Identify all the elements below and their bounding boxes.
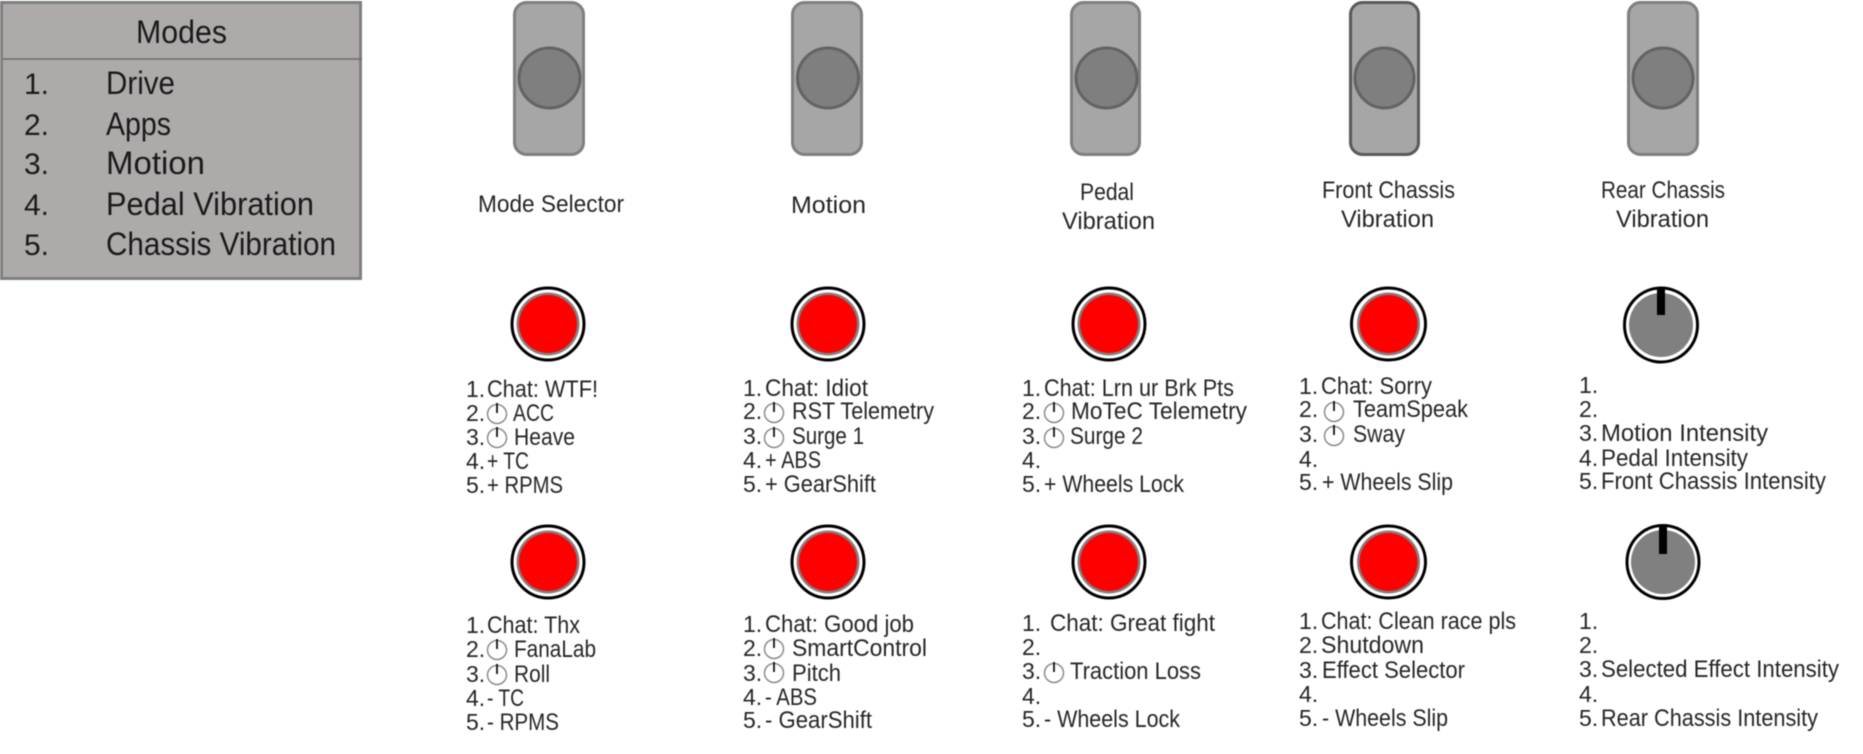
button: column 4 bottom — [1352, 526, 1426, 598]
text block: modes list: Apps — [106, 106, 171, 142]
button: column 2 top — [792, 288, 864, 360]
text block: column 1 top functions — [466, 376, 598, 499]
text block: column 1 bottom functions: Roll — [514, 661, 550, 688]
text block: column 2 top functions: 1. — [743, 375, 762, 401]
text block: column 4 bottom functions: 5. — [1299, 705, 1318, 731]
text block: column 4 top functions: 1. — [1299, 373, 1318, 399]
label: front chassis vibration: Vibration — [1341, 206, 1434, 233]
text block: column 1 top functions: Chat: WTF! — [487, 376, 598, 403]
text block: column 3 bottom functions: - Wheels Lock — [1044, 706, 1181, 733]
label: pedal vibration: Vibration — [1062, 208, 1155, 235]
text block: column 5 bottom functions: 1. — [1579, 608, 1598, 634]
text block: modes list: Drive — [106, 65, 175, 101]
text block: column 5 top functions: 5. — [1579, 468, 1598, 494]
text block: column 5 bottom functions: 2. — [1579, 632, 1598, 658]
text block: column 2 bottom functions: - ABS — [765, 684, 817, 711]
text block: column 3 bottom functions: 4. — [1022, 683, 1041, 709]
button: column 2 bottom — [792, 526, 864, 598]
text block: column 2 top functions: RST Telemetry — [792, 398, 934, 425]
icon: power — [488, 664, 506, 684]
text block: column 3 top functions: 5. — [1022, 471, 1041, 497]
text block: column 4 top functions: 3. — [1299, 421, 1318, 447]
text block: column 5 bottom functions: Selected Effect Intensity — [1601, 656, 1839, 683]
text block: column 4 top functions: 4. — [1299, 446, 1318, 472]
text block: column 2 top functions: Chat: Idiot — [765, 375, 868, 402]
text block: column 1 top functions: Heave — [514, 424, 575, 451]
icon: power — [764, 662, 784, 682]
text block: column 2 top functions: 3. — [743, 423, 762, 449]
text block: modes list: 5. — [24, 229, 49, 262]
icon: power — [1324, 401, 1344, 422]
text block: column 4 bottom functions: Effect Selector — [1322, 657, 1465, 684]
text block: column 2 top functions: Surge 1 — [792, 423, 864, 450]
label: pedal vibration — [1062, 179, 1155, 235]
label: pedal vibration: Pedal — [1080, 179, 1134, 206]
icon: power — [1324, 425, 1344, 446]
text block: column 1 top functions: 5. — [466, 472, 485, 498]
text block: column 1 top functions: 3. — [466, 424, 485, 450]
text block: column 2 top functions — [743, 375, 934, 498]
text block: column 4 bottom functions — [1299, 608, 1516, 732]
text block: column 2 bottom functions: 3. — [743, 660, 762, 686]
text block: column 4 top functions: TeamSpeak — [1353, 396, 1469, 423]
text block: column 3 bottom functions — [1022, 610, 1215, 733]
text block: column 2 top functions: + GearShift — [765, 471, 876, 498]
toggle: mode selector — [514, 2, 584, 154]
text block: column 2 bottom functions: 5. — [743, 707, 762, 733]
icon: power — [764, 427, 784, 448]
text block: column 5 top functions: Motion Intensity — [1601, 420, 1768, 447]
text block: column 4 top functions: Chat: Sorry — [1321, 373, 1432, 400]
knob: rotary top — [1624, 287, 1698, 362]
text block: column 5 bottom functions: 3. — [1579, 656, 1598, 682]
text block: column 2 bottom functions: Pitch — [792, 660, 841, 687]
text block: column 4 bottom functions: - Wheels Slip — [1322, 705, 1448, 732]
text block: column 4 bottom functions: 2. — [1299, 632, 1318, 658]
text block: column 3 bottom functions: 5. — [1022, 706, 1041, 732]
text block: column 2 top functions: 2. — [743, 398, 762, 424]
text block: column 3 top functions: 2. — [1022, 398, 1041, 424]
toggle: motion — [792, 2, 862, 154]
text block: column 1 bottom functions: 1. — [466, 612, 485, 638]
text block: column 5 top functions: 2. — [1579, 396, 1598, 422]
text block: column 5 top functions: Pedal Intensity — [1601, 445, 1748, 472]
text block: column 2 bottom functions: Chat: Good job — [765, 611, 914, 638]
button: column 3 top — [1073, 288, 1145, 360]
text block: column 2 bottom functions: - GearShift — [765, 707, 872, 734]
text block: column 3 bottom functions: 1. — [1022, 610, 1041, 636]
icon: power — [488, 427, 506, 448]
text block: column 4 bottom functions: Shutdown — [1321, 632, 1424, 659]
button: column 1 top — [512, 288, 584, 360]
text block: column 5 top functions: 3. — [1579, 420, 1598, 446]
text block: column 4 bottom functions: 1. — [1299, 608, 1318, 634]
text block: column 2 bottom functions: 1. — [743, 611, 762, 637]
text block: column 4 top functions: 2. — [1299, 396, 1318, 422]
text block: modes list: Motion — [106, 145, 205, 181]
text block: column 5 bottom functions: 5. — [1579, 705, 1598, 731]
toggle: pedal vibration — [1072, 2, 1140, 154]
text block: column 1 top functions: 1. — [466, 376, 485, 402]
text block: column 1 top functions: ACC — [513, 400, 554, 427]
label: motion: Motion — [791, 192, 866, 219]
text block: column 3 bottom functions: Traction Loss — [1070, 658, 1201, 685]
text block: column 4 bottom functions: 3. — [1299, 657, 1318, 683]
button: column 4 top — [1352, 288, 1426, 360]
text block: column 1 top functions: 2. — [466, 400, 485, 426]
text block: column 3 top functions: 3. — [1022, 423, 1041, 449]
text block: column 1 bottom functions: - RPMS — [487, 709, 559, 736]
label: rear chassis vibration: Vibration — [1616, 206, 1709, 233]
toggle: front chassis vibration — [1350, 2, 1418, 154]
text block: modes list: 1. — [24, 68, 49, 101]
text block: modes list: 2. — [24, 109, 49, 142]
text block: column 5 top functions: 4. — [1579, 445, 1598, 471]
button: column 1 bottom — [512, 526, 584, 598]
label: mode selector: Mode Selector — [478, 191, 624, 218]
text block: column 1 bottom functions: - TC — [487, 685, 524, 712]
text block: column 3 top functions: 4. — [1022, 447, 1041, 473]
icon: power — [764, 402, 784, 422]
text block: column 1 top functions: + RPMS — [487, 472, 563, 499]
icon: power — [1044, 662, 1064, 682]
text block: modes list: 4. — [24, 189, 49, 222]
text block: column 2 bottom functions — [743, 611, 927, 734]
text block: column 1 bottom functions: FanaLab — [514, 636, 596, 663]
text block: column 1 bottom functions: Chat: Thx — [487, 612, 580, 639]
text block: modes list: Chassis Vibration — [106, 226, 336, 262]
text block: column 5 bottom functions — [1579, 608, 1839, 732]
label: rear chassis vibration: Rear Chassis — [1601, 177, 1725, 204]
text block: column 1 bottom functions: 4. — [466, 685, 485, 711]
text block: column 3 top functions: 1. — [1022, 375, 1041, 401]
icon: power — [488, 639, 506, 660]
text block: modes list: Pedal Vibration — [106, 186, 314, 222]
text block: column 2 bottom functions: SmartControl — [792, 635, 927, 662]
text block: column 2 bottom functions: 2. — [743, 635, 762, 661]
text block: column 5 top functions: Front Chassis Intensity — [1601, 468, 1826, 495]
text block: column 1 top functions: 4. — [466, 448, 485, 474]
text block: column 3 bottom functions: 3. — [1022, 658, 1041, 684]
text block: modes list — [24, 65, 336, 262]
text block: column 3 top functions — [1022, 375, 1247, 498]
text block: column 1 bottom functions: 2. — [466, 636, 485, 662]
text block: column 1 top functions: + TC — [487, 448, 529, 475]
text block: column 2 top functions: 4. — [743, 447, 762, 473]
text block: column 3 top functions: Chat: Lrn ur Brk Pts — [1044, 375, 1234, 402]
label: front chassis vibration: Front Chassis — [1322, 177, 1455, 204]
text block: column 4 top functions — [1299, 373, 1469, 496]
text block: column 5 bottom functions: 4. — [1579, 681, 1598, 707]
text block: column 3 top functions: MoTeC Telemetry — [1071, 398, 1247, 425]
text block: modes list: 3. — [24, 148, 49, 181]
label: rear chassis vibration — [1601, 177, 1725, 233]
text block: column 2 top functions: 5. — [743, 471, 762, 497]
text block: column 4 top functions: + Wheels Slip — [1322, 469, 1453, 496]
text block: column 2 bottom functions: 4. — [743, 684, 762, 710]
text block: column 5 top functions — [1579, 372, 1826, 495]
knob: rotary bottom — [1627, 526, 1699, 598]
text block: column 3 bottom functions: Chat: Great fight — [1050, 610, 1215, 637]
text block: column 4 top functions: 5. — [1299, 469, 1318, 495]
text block: column 5 top functions: 1. — [1579, 372, 1598, 398]
text block: column 5 bottom functions: Rear Chassis Intensity — [1601, 705, 1818, 732]
text block: column 4 top functions: Sway — [1353, 421, 1405, 448]
text block: column 1 bottom functions: 5. — [466, 709, 485, 735]
text block: column 4 bottom functions: Chat: Clean race pls — [1321, 608, 1516, 635]
text block: column 3 top functions: + Wheels Lock — [1044, 471, 1185, 498]
icon: power — [1044, 402, 1064, 422]
panel: modes — [2, 2, 362, 278]
icon: power — [764, 638, 784, 658]
text block: column 1 bottom functions: 3. — [466, 661, 485, 687]
text block: column 2 top functions: + ABS — [765, 447, 821, 474]
toggle: rear chassis vibration — [1628, 2, 1698, 154]
text block: column 3 bottom functions: 2. — [1022, 634, 1041, 660]
icon: power — [1044, 427, 1064, 448]
heading: modes: Modes — [136, 14, 227, 50]
text block: column 1 bottom functions — [466, 612, 596, 736]
icon: power — [488, 403, 506, 424]
button: column 3 bottom — [1073, 526, 1145, 598]
label: front chassis vibration — [1322, 177, 1455, 233]
text block: column 4 bottom functions: 4. — [1299, 681, 1318, 707]
text block: column 3 top functions: Surge 2 — [1070, 423, 1143, 450]
